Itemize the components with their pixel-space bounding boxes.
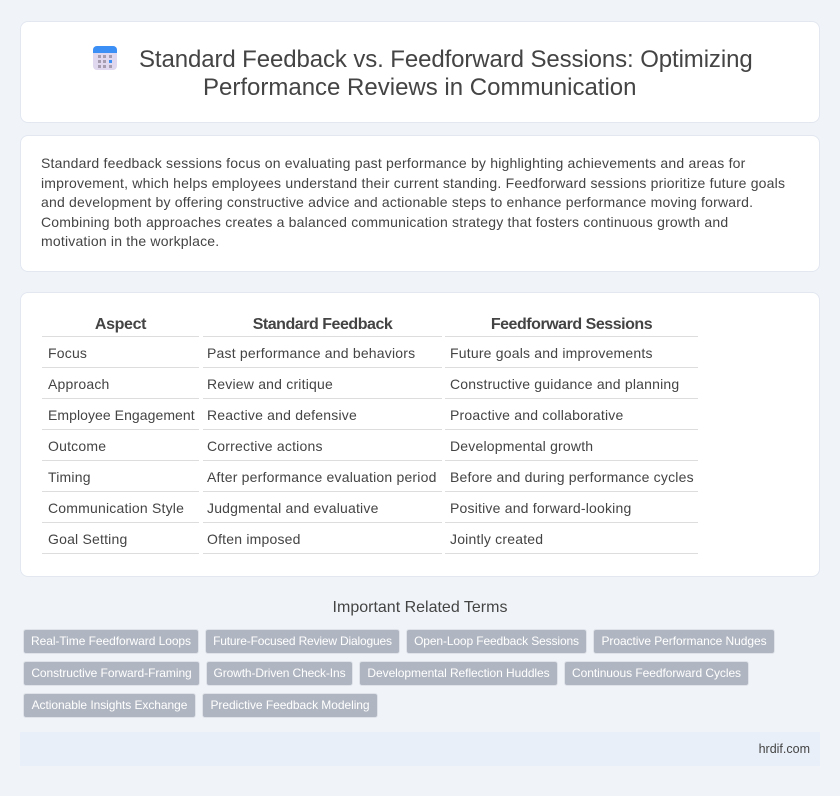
related term tags: Open-Loop Feedback Sessions bbox=[414, 634, 579, 648]
related term tags bbox=[23, 629, 775, 718]
related term tags: Growth-Driven Check-Ins bbox=[214, 666, 345, 680]
text block: introduction: Standard feedback sessions focus on evaluating past performance by highlighting achievements and areas for bbox=[41, 155, 746, 171]
table: comparison: Jointly created bbox=[450, 531, 543, 547]
table header: Standard Feedback: Standard Feedback bbox=[253, 316, 392, 333]
footer source: hrdif.com bbox=[759, 742, 810, 756]
panel: introduction bbox=[20, 135, 820, 272]
table: comparison bbox=[42, 316, 698, 554]
panel: header bbox=[20, 21, 820, 123]
related term tags: Actionable Insights Exchange bbox=[32, 698, 187, 712]
table: comparison: Reactive and defensive bbox=[207, 407, 357, 423]
table: comparison: Often imposed bbox=[207, 531, 301, 547]
related term tags: Developmental Reflection Huddles bbox=[367, 666, 550, 680]
title: Standard Feedback vs. Feedforward Sessions: Optimizing bbox=[139, 46, 753, 73]
table header: Feedforward Sessions: Feedforward Sessions bbox=[491, 316, 652, 333]
table: comparison: Timing bbox=[48, 469, 91, 485]
table header: Aspect: Aspect bbox=[95, 316, 146, 333]
related term tags: Continuous Feedforward Cycles bbox=[572, 666, 741, 680]
table: comparison: Corrective actions bbox=[207, 438, 323, 454]
related term tags: Predictive Feedback Modeling bbox=[210, 698, 370, 712]
table: comparison: Developmental growth bbox=[450, 438, 593, 454]
heading: important related terms: Important Related Terms bbox=[333, 599, 507, 616]
table: comparison: Employee Engagement bbox=[48, 407, 195, 423]
text block: introduction: and development by offering constructive advice and actionable steps to enhance performance moving forward. bbox=[41, 194, 753, 210]
table: comparison: Past performance and behaviors bbox=[207, 345, 415, 361]
text block: introduction: motivation in the workplace. bbox=[41, 233, 219, 249]
table: comparison: Judgmental and evaluative bbox=[207, 500, 379, 516]
related term tags: Real-Time Feedforward Loops bbox=[31, 634, 191, 648]
table: comparison: Focus bbox=[48, 345, 87, 361]
table: comparison: Outcome bbox=[48, 438, 106, 454]
text block: introduction: Combining both approaches creates a balanced communication strategy that fosters continuous growth and bbox=[41, 214, 728, 230]
table: comparison: Future goals and improvements bbox=[450, 345, 653, 361]
table: comparison: Positive and forward-looking bbox=[450, 500, 631, 516]
table: comparison: Communication Style bbox=[48, 500, 184, 516]
text block: introduction bbox=[41, 155, 785, 249]
icon: calendar bbox=[93, 46, 117, 70]
table: comparison: Proactive and collaborative bbox=[450, 407, 624, 423]
text block: introduction: improvement, which helps employees understand their current standing. Feedforward sessions prioritize future goals bbox=[41, 175, 785, 191]
title: Performance Reviews in Communication bbox=[203, 74, 636, 101]
panel: comparison table bbox=[20, 292, 820, 577]
table: comparison: Review and critique bbox=[207, 376, 333, 392]
title bbox=[139, 46, 753, 101]
related term tags: Proactive Performance Nudges bbox=[601, 634, 767, 648]
table: comparison: After performance evaluation period bbox=[207, 469, 437, 485]
table: comparison: Before and during performance cycles bbox=[450, 469, 694, 485]
table: comparison: Constructive guidance and planning bbox=[450, 376, 679, 392]
related term tags: Future-Focused Review Dialogues bbox=[213, 634, 392, 648]
footer bbox=[20, 732, 820, 766]
table: comparison: Approach bbox=[48, 376, 110, 392]
table: comparison: Goal Setting bbox=[48, 531, 127, 547]
related term tags: Constructive Forward-Framing bbox=[31, 666, 192, 680]
